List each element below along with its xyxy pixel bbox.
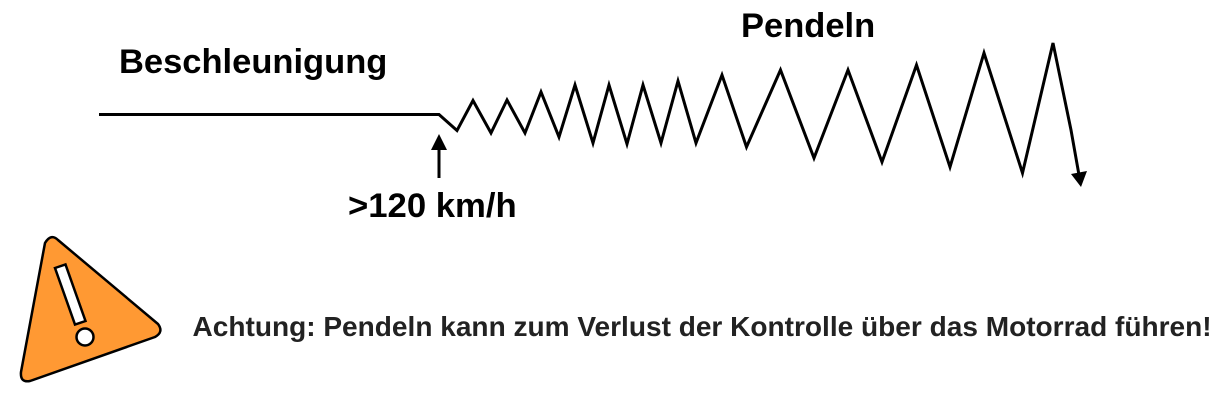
arrowhead: end of oscillation [1071, 171, 1087, 187]
icon: warning triangle [21, 237, 160, 381]
heading: Beschleunigung: Beschleunigung [119, 43, 387, 81]
heading: Pendeln: Pendeln [741, 7, 875, 45]
line chart: acceleration line then wobble oscillation [99, 43, 1079, 175]
warning text: Achtung: Pendeln kann zum Verlust der Kontrolle über das Motorrad führen! [192, 311, 1212, 342]
arrow: speed threshold marker [431, 134, 447, 178]
label: speed threshold: >120 km/h [348, 187, 517, 225]
